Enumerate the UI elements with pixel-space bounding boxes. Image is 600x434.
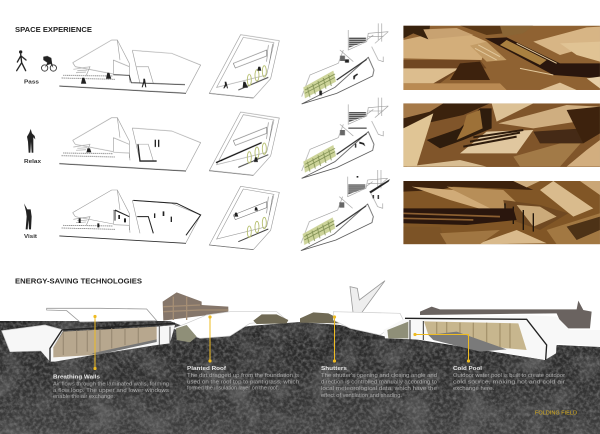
diagram: pass site plan — [302, 23, 388, 104]
text block: shutters: effect of ventilation and shading. — [321, 393, 402, 399]
label: relax: Relax — [24, 159, 41, 165]
white terraces — [173, 312, 287, 338]
timber wall — [424, 321, 527, 350]
text block: shutters: Shutters — [321, 366, 347, 372]
text block: cold pool: Cold Pool — [453, 366, 482, 372]
text block: cold pool: cold source, making hot and cold air — [453, 380, 565, 386]
heading: energy-saving technologies: ENERGY-SAVING TECHNOLOGIES — [15, 276, 142, 286]
diagram: relax site plan — [302, 98, 388, 178]
text block: shutters: The shutter's opening and closing angle and — [321, 373, 437, 379]
text block: planted roof: formed the insulation layer on the roof. — [187, 386, 279, 392]
leader line: breathing walls — [93, 315, 97, 370]
panel: model photographs — [403, 26, 600, 244]
text block: planted roof: The dirt dragged up from the foundation is — [187, 373, 300, 379]
text block: shutters: local meteorological data, which have the — [321, 386, 437, 392]
signature: FOLDING FIELD — [535, 410, 577, 416]
ground: dark rock section — [0, 321, 600, 434]
row: relax — [27, 112, 279, 175]
section outline — [405, 318, 547, 360]
row: visit — [24, 186, 279, 250]
diagram: relax plan view — [209, 112, 279, 175]
text block: breathing walls: Air flows through the laminated walls, forming — [53, 382, 169, 388]
tree — [176, 325, 197, 342]
timber wall — [53, 327, 157, 357]
icon: standing person — [27, 129, 35, 153]
photo: pass model view — [403, 26, 600, 90]
section drawing: right building — [300, 281, 600, 360]
diagram: visit plan view — [209, 186, 279, 250]
crane structure — [350, 281, 385, 315]
white terraces — [333, 312, 403, 335]
white shell — [383, 315, 600, 360]
text block: cold pool: exchange here. — [453, 386, 494, 392]
seating — [428, 332, 507, 352]
diagram: visit site plan — [301, 170, 390, 251]
icon: cyclist — [41, 56, 56, 71]
photo: relax model view — [403, 103, 600, 167]
text block: breathing walls: a flow loop. The upper and lower windows — [53, 388, 170, 394]
leader line: planted roof — [208, 315, 212, 363]
wireframe roof — [47, 308, 157, 322]
diagram: pass perspective — [59, 40, 201, 93]
text block: planted roof: used on the roof top to plant grass, which — [187, 380, 299, 386]
label: visit: Visit — [24, 234, 37, 240]
white wing — [2, 325, 63, 352]
floor slab — [40, 325, 175, 362]
panel: space experience diagrams — [17, 23, 390, 251]
diagram: relax perspective — [59, 118, 201, 171]
section outline — [50, 323, 175, 362]
text block: cold pool: Outdoor water pool is built to create outdoor — [453, 373, 565, 379]
leader line: cold pool — [413, 333, 470, 363]
photo: visit model view — [403, 181, 600, 244]
label: pass: Pass — [24, 80, 39, 86]
leader line: shutters — [333, 315, 336, 363]
text block: cold pool — [453, 366, 565, 392]
diagram: pass plan view — [209, 35, 279, 98]
back house — [420, 301, 592, 328]
text block: breathing walls — [53, 374, 170, 400]
row: pass — [17, 35, 279, 98]
icon: walking person — [17, 51, 26, 71]
icon: waving person — [24, 203, 32, 229]
text block: breathing walls: enable the air exchange. — [53, 394, 115, 400]
column: site plans — [301, 23, 390, 251]
stone house — [163, 292, 228, 321]
small pavilion — [300, 312, 342, 323]
text block: shutters: direction is controlled manually according to — [321, 380, 437, 386]
heading: space experience: SPACE EXPERIENCE — [15, 25, 92, 34]
section drawing: left building — [2, 292, 288, 362]
text block: shutters — [321, 366, 437, 399]
stairs — [92, 339, 157, 355]
text block: planted roof — [187, 366, 300, 392]
text block: planted roof: Planted Roof — [187, 366, 226, 372]
pavilion — [253, 314, 288, 324]
diagram: visit perspective — [59, 190, 201, 243]
text block: breathing walls: Breathing Walls — [53, 374, 100, 380]
tree — [387, 322, 408, 338]
